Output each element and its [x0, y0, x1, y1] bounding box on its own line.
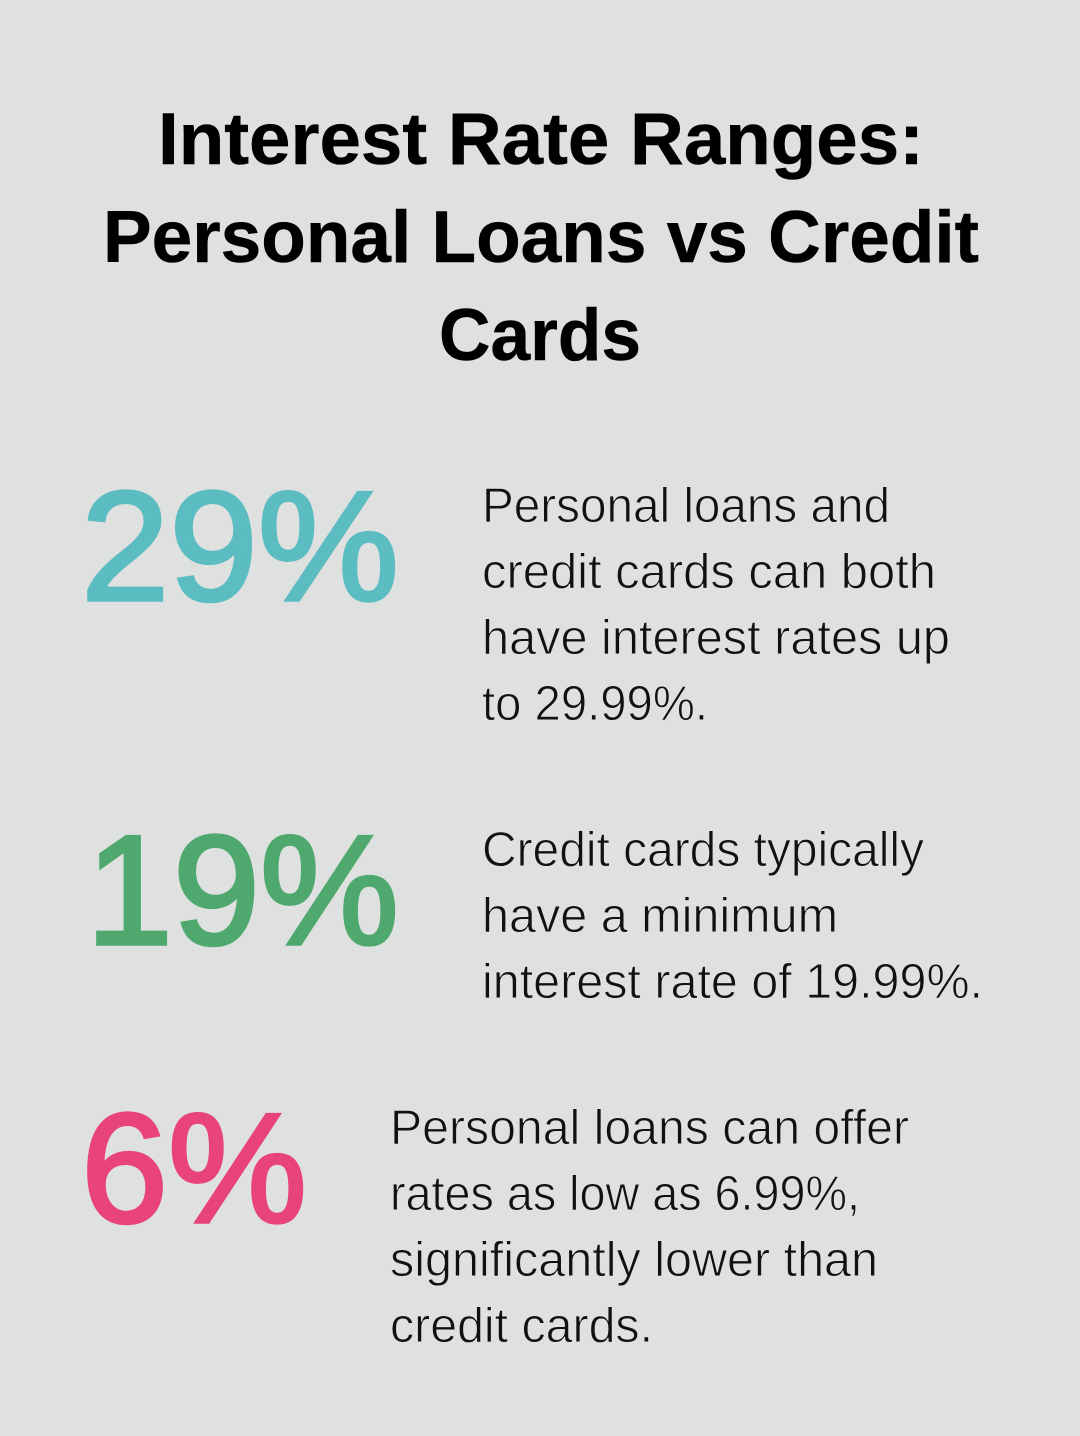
description: 19%: [482, 823, 983, 1009]
big number: 6%: 6%: [81, 1082, 307, 1256]
description: 19%: have a minimum: [482, 889, 838, 943]
description: 29%: Personal loans and: [482, 479, 890, 533]
title: Interest Rate Ranges:: [158, 99, 924, 180]
stat: 6%: [81, 1082, 909, 1353]
title: [103, 99, 979, 376]
stat: 19%: [86, 804, 983, 1009]
description: 6%: significantly lower than: [390, 1233, 878, 1287]
big number: 29%: 29%: [81, 460, 399, 634]
description: 6%: rates as low as 6.99%,: [390, 1167, 860, 1221]
title: Cards: [439, 295, 641, 376]
description: 29%: have interest rates up: [482, 611, 950, 665]
big number: 19%: 19%: [86, 804, 399, 978]
description: 29%: [482, 479, 950, 731]
description: 29%: to 29.99%.: [482, 677, 708, 731]
description: 19%: interest rate of 19.99%.: [482, 955, 983, 1009]
description: 19%: Credit cards typically: [482, 823, 924, 877]
description: 6%: credit cards.: [390, 1299, 653, 1353]
description: 6%: Personal loans can offer: [390, 1101, 909, 1155]
stat: 29%: [81, 460, 950, 731]
description: 6%: [390, 1101, 909, 1353]
description: 29%: credit cards can both: [482, 545, 936, 599]
title: Personal Loans vs Credit: [103, 197, 979, 278]
